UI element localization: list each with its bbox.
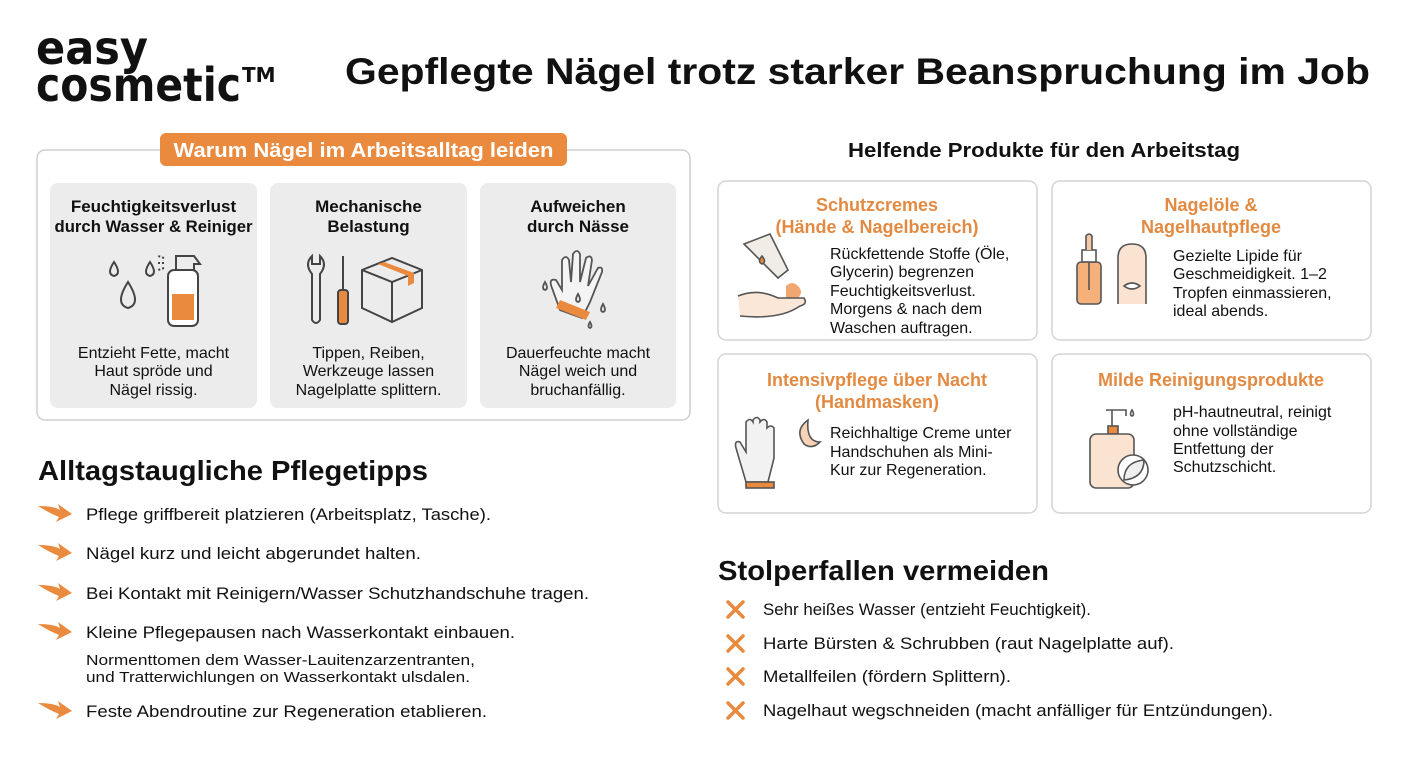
list: Stolperfallen bbox=[728, 600, 1273, 720]
card: Schutzcremes bbox=[718, 181, 1037, 340]
card: Schutzcremes: Feuchtigkeitsverlust. bbox=[830, 283, 976, 300]
list: Pflegetipps: Kleine Pflegepausen nach Wasserkontakt einbauen. bbox=[86, 623, 515, 642]
card: Mechanische Belastung: Belastung bbox=[327, 217, 410, 236]
list: Pflegetipps: Nägel kurz und leicht abgerundet halten. bbox=[86, 544, 421, 563]
logo: TM bbox=[242, 63, 276, 87]
logo: cosmetic bbox=[36, 58, 241, 112]
panel heading tag: Warum Nägel im Arbeitsalltag leiden bbox=[174, 140, 554, 162]
heading: Stolperfallen: Stolperfallen vermeiden bbox=[718, 555, 1049, 586]
card: Nagelöle: Geschmeidigkeit. 1–2 bbox=[1173, 266, 1327, 283]
list: Stolperfallen: Sehr heißes Wasser (entzieht Feuchtigkeit). bbox=[763, 600, 1091, 619]
icon: drops and spray bottle bbox=[110, 256, 200, 326]
card: Aufweichen durch Nässe: durch Nässe bbox=[527, 217, 629, 236]
card: Schutzcremes: Rückfettende Stoffe (Öle, bbox=[830, 245, 1009, 263]
panel: causes bbox=[37, 133, 690, 420]
icon: oil dropper and nail bbox=[1077, 234, 1146, 304]
card: Nagelöle: Nagelhautpflege bbox=[1141, 217, 1281, 237]
card: Milde Reinigungsprodukte: Schutzschicht. bbox=[1173, 459, 1276, 476]
icon: glove and moon bbox=[736, 418, 820, 488]
card: Aufweichen durch Nässe bbox=[480, 183, 676, 408]
card: Intensivpflege bbox=[718, 354, 1037, 513]
list: Pflegetipps bbox=[38, 504, 589, 721]
card: Milde Reinigungsprodukte: Milde Reinigungsprodukte bbox=[1098, 370, 1324, 390]
card: Milde Reinigungsprodukte: Entfettung der bbox=[1173, 441, 1274, 458]
list: Stolperfallen: Nagelhaut wegschneiden (macht anfälliger für Entzündungen). bbox=[763, 701, 1273, 720]
card: Mechanische Belastung: Mechanische bbox=[315, 197, 422, 216]
card: Feuchtigkeitsverlust: Feuchtigkeitsverlust bbox=[71, 197, 237, 216]
card: Nagelöle: Tropfen einmassieren, bbox=[1173, 285, 1332, 302]
card: Intensivpflege: (Handmasken) bbox=[815, 392, 939, 412]
card: Schutzcremes: (Hände & Nagelbereich) bbox=[775, 217, 979, 237]
icon: soap dispenser with leaf bbox=[1090, 410, 1148, 488]
list: Stolperfallen: Harte Bürsten & Schrubben (raut Nagelplatte auf). bbox=[763, 634, 1174, 653]
list: Stolperfallen: Metallfeilen (fördern Splittern). bbox=[763, 667, 1011, 686]
list: Pflegetipps: Feste Abendroutine zur Regeneration etablieren. bbox=[86, 702, 487, 721]
heading: Helfende Produkte: Helfende Produkte für den Arbeitstag bbox=[848, 140, 1240, 162]
card: Milde Reinigungsprodukte: pH-hautneutral, reinigt bbox=[1173, 404, 1332, 421]
list: Pflegetipps: Normenttomen dem Wasser-Lauitenzarzentranten, bbox=[86, 652, 475, 669]
card: Feuchtigkeitsverlust: durch Wasser & Reiniger bbox=[54, 217, 253, 236]
card: Feuchtigkeitsverlust: Entzieht Fette, macht bbox=[78, 345, 230, 362]
card: Aufweichen durch Nässe: Nägel weich und bbox=[519, 363, 637, 380]
card: Nagelöle: ideal abends. bbox=[1173, 303, 1268, 320]
icon: tools and box bbox=[308, 256, 422, 324]
card: Feuchtigkeitsverlust: Haut spröde und bbox=[94, 363, 213, 380]
card: Nagelöle bbox=[1052, 181, 1371, 340]
card: Intensivpflege: Kur zur Regeneration. bbox=[830, 462, 987, 479]
card: Intensivpflege: Reichhaltige Creme unter bbox=[830, 425, 1012, 442]
panel heading tag bbox=[160, 133, 567, 166]
card: Milde Reinigungsprodukte bbox=[1052, 354, 1371, 513]
card: Aufweichen durch Nässe: Aufweichen bbox=[530, 197, 626, 216]
card: Feuchtigkeitsverlust bbox=[50, 183, 257, 408]
logo: easy bbox=[36, 21, 148, 75]
card: Schutzcremes: Waschen auftragen. bbox=[830, 320, 973, 337]
card: Milde Reinigungsprodukte: ohne vollständige bbox=[1173, 423, 1298, 440]
card: Schutzcremes: Glycerin) begrenzen bbox=[830, 264, 974, 281]
card: Mechanische Belastung: Nagelplatte splittern. bbox=[296, 382, 441, 399]
card: Mechanische Belastung bbox=[270, 183, 467, 408]
card: Aufweichen durch Nässe: Dauerfeuchte macht bbox=[506, 345, 651, 362]
card: Nagelöle: Gezielte Lipide für bbox=[1173, 248, 1303, 265]
card: Feuchtigkeitsverlust: Nägel rissig. bbox=[109, 382, 198, 399]
card: Schutzcremes: Schutzcremes bbox=[816, 195, 938, 215]
card: Intensivpflege: Handschuhen als Mini- bbox=[830, 444, 993, 461]
card: Schutzcremes: Morgens & nach dem bbox=[830, 301, 982, 318]
icon: cream tube and hand bbox=[738, 234, 805, 317]
heading: Pflegetipps: Alltagstaugliche Pflegetipps bbox=[38, 455, 428, 486]
logo bbox=[36, 21, 276, 112]
card: Mechanische Belastung: Tippen, Reiben, bbox=[312, 345, 425, 362]
card: Aufweichen durch Nässe: bruchanfällig. bbox=[530, 382, 626, 399]
card: Mechanische Belastung: Werkzeuge lassen bbox=[303, 363, 434, 380]
title: Gepflegte Nägel trotz starker Beanspruchung im Job bbox=[345, 51, 1370, 92]
list: Pflegetipps: Pflege griffbereit platzieren (Arbeitsplatz, Tasche). bbox=[86, 505, 491, 524]
card: Nagelöle: Nagelöle & bbox=[1164, 195, 1258, 215]
card: Intensivpflege: Intensivpflege über Nacht bbox=[767, 370, 987, 390]
icon: wet glove bbox=[543, 251, 605, 328]
list: Pflegetipps: Bei Kontakt mit Reinigern/Wasser Schutzhandschuhe tragen. bbox=[86, 584, 589, 603]
list: Pflegetipps: und Tratterwichlungen on Wasserkontakt ulsdalen. bbox=[86, 669, 470, 686]
